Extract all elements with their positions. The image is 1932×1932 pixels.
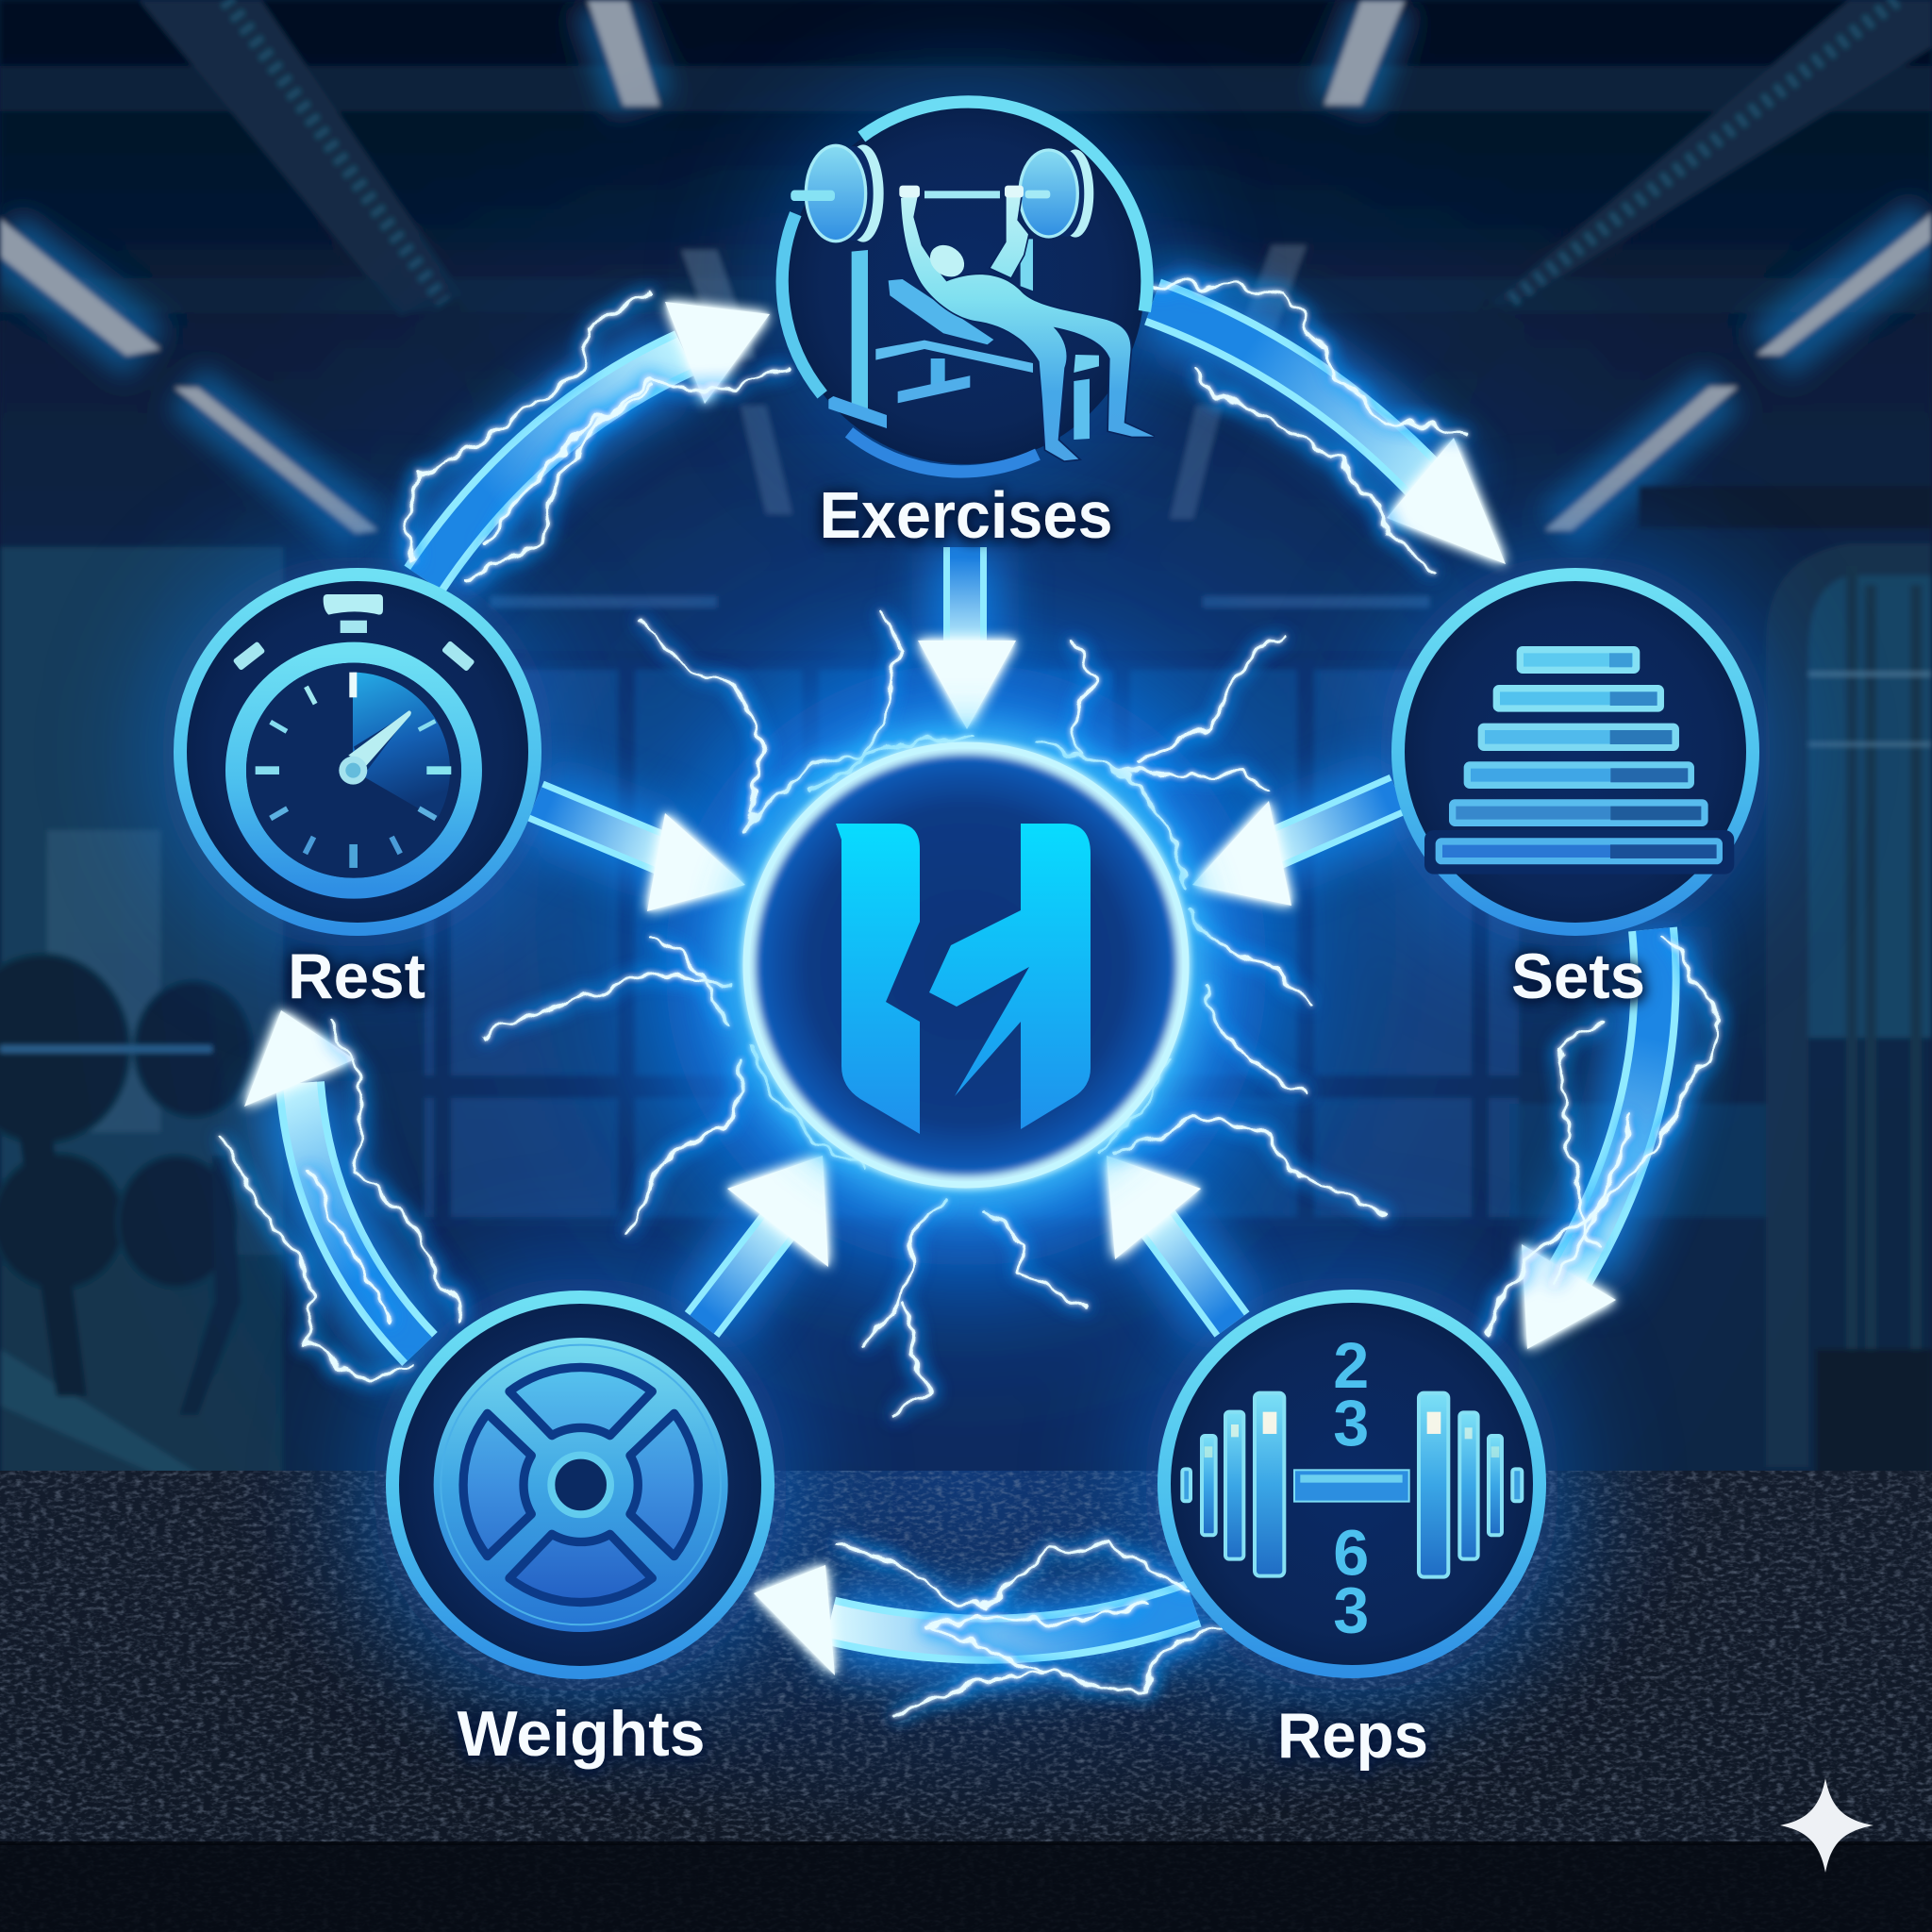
arrow: weights to rest [244, 1010, 420, 1349]
label: rest: Rest [288, 941, 425, 1012]
label: sets: Sets [1511, 941, 1645, 1012]
panel: weights node [392, 1297, 768, 1673]
hub disc [748, 747, 1184, 1183]
icon: stopwatch [233, 594, 475, 889]
lightning bolts [225, 281, 1720, 1715]
rep numbers [1333, 1330, 1369, 1646]
label: exercises: Exercises [819, 478, 1113, 552]
arrow: reps to weights [754, 1565, 1193, 1675]
left glass wall [0, 547, 283, 1481]
left barbell plates [0, 955, 252, 1415]
central hub [730, 729, 1202, 1201]
outer cycle arrows [244, 302, 1656, 1675]
rep numbers: 6 [1333, 1517, 1369, 1589]
arrow: reps to centre [1107, 1156, 1232, 1324]
rep numbers: 2 [1333, 1330, 1369, 1402]
windows [425, 596, 1519, 1472]
label: reps: Reps [1277, 1700, 1428, 1772]
icon: sparkle watermark [1780, 1778, 1874, 1873]
arrow: rest to centre [536, 801, 745, 911]
icon: bench press [782, 102, 1154, 472]
panel: rest node [180, 575, 535, 929]
arrow: rest to exercises [425, 302, 770, 579]
label: weights: Weights [457, 1698, 706, 1770]
icon: stacked set bars [1424, 650, 1734, 874]
glow halos behind the cycle [159, 87, 1774, 1694]
arrow: sets to centre [1192, 794, 1398, 906]
logo: H with lightning [836, 824, 1091, 1134]
floor [0, 1471, 1932, 1932]
panel: exercises node [782, 102, 1154, 472]
rep numbers: 3 [1333, 1574, 1369, 1646]
arrow: exercises to centre [918, 547, 1016, 729]
arrow: weights to centre [702, 1156, 828, 1324]
panel: reps node [1164, 1296, 1540, 1672]
arrow: sets to reps [1522, 929, 1656, 1349]
inward arrows to centre [536, 547, 1398, 1324]
right machine [1509, 486, 1932, 1509]
rep numbers: 3 [1333, 1388, 1369, 1459]
panel: sets node [1398, 575, 1753, 929]
arrow: exercises to sets [1153, 302, 1506, 564]
mid glow [0, 0, 1932, 1481]
icon: dumbbell with rep numbers [1182, 1330, 1522, 1646]
icon: weight plate [434, 1338, 728, 1632]
